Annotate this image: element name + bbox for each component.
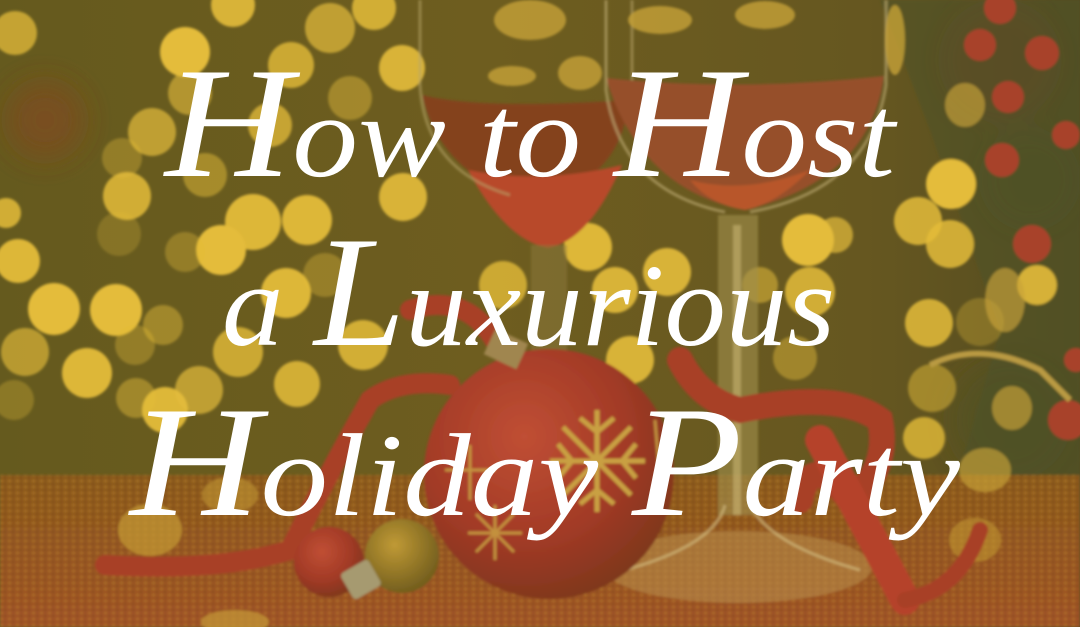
bokeh lights xyxy=(0,0,1057,459)
red berries and gold branch details xyxy=(930,0,1080,492)
gold lights through glasses xyxy=(488,0,905,90)
wine glass right xyxy=(604,0,886,603)
title line 2: a Luxurious xyxy=(222,205,835,380)
soft red glows xyxy=(5,0,1080,480)
title line 1: How to Host xyxy=(163,36,899,211)
small ornaments xyxy=(294,519,439,600)
red ribbon xyxy=(105,305,980,600)
wine glass left xyxy=(420,0,632,365)
floor xyxy=(0,475,1080,627)
large red ornament xyxy=(424,329,674,599)
title xyxy=(128,36,961,550)
title line 3: Holiday Party xyxy=(128,375,961,550)
evergreen foliage xyxy=(880,0,1080,500)
